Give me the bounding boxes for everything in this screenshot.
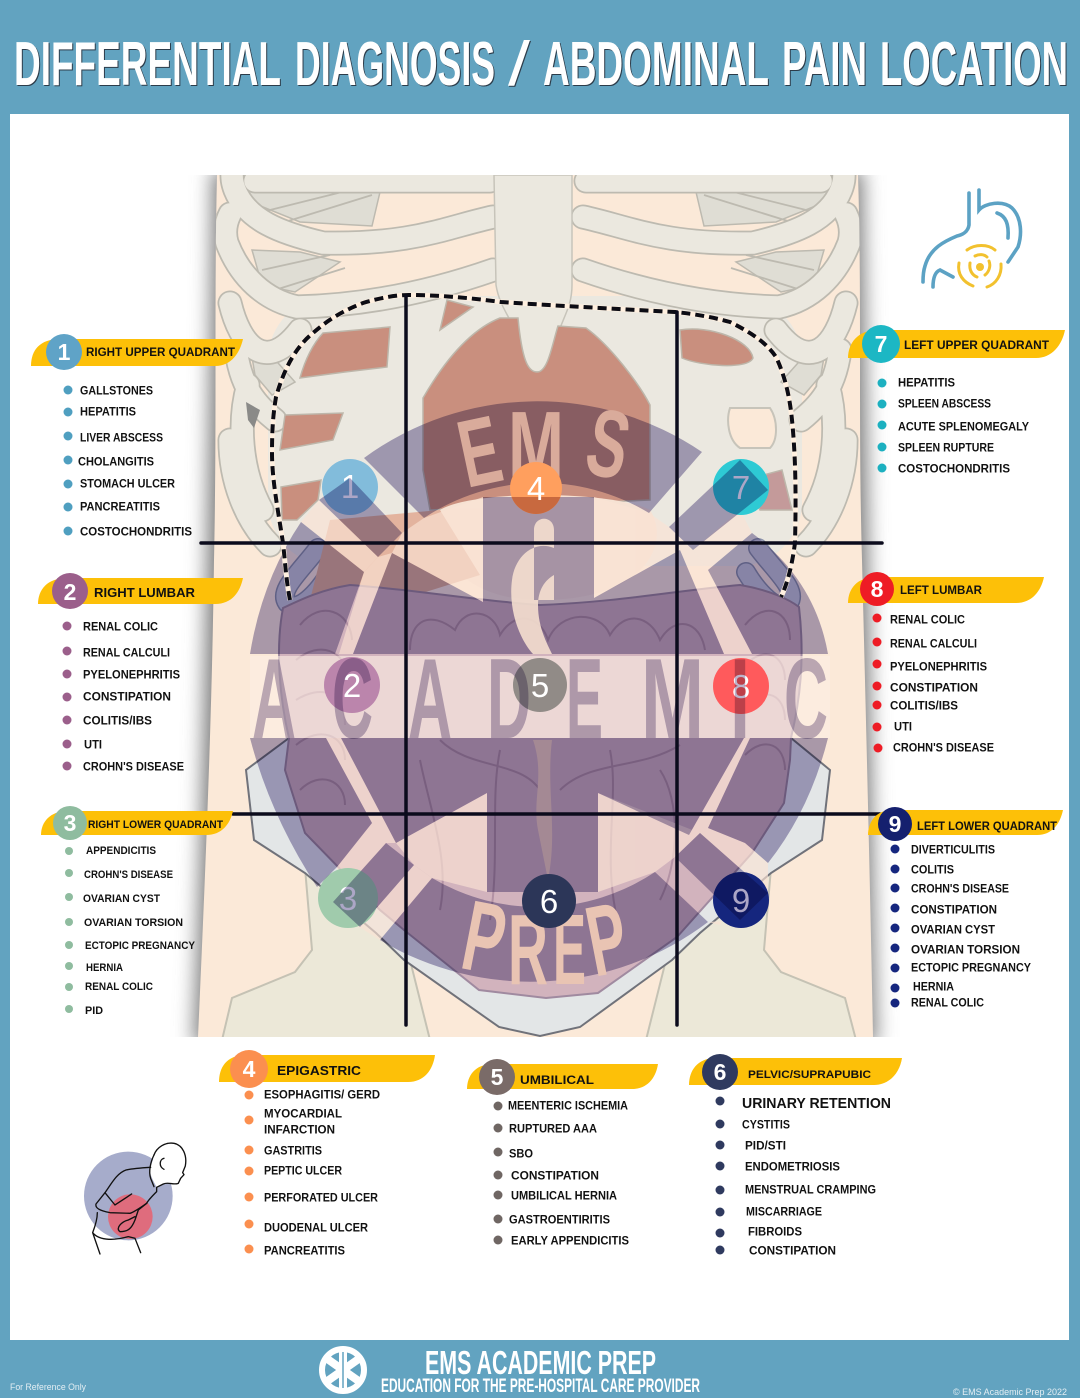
marker 3: 3 [339, 880, 357, 917]
marker 8: 8 [732, 668, 750, 705]
number badge [702, 1054, 738, 1090]
list: COLITIS/IBS [890, 698, 958, 712]
number badge: 2 [64, 579, 76, 605]
PREP arc letters [454, 879, 636, 1006]
number badge [46, 334, 82, 370]
title: ABDOMINAL [543, 30, 769, 99]
number badge [878, 807, 912, 841]
list: INFARCTION [264, 1122, 335, 1136]
panel: umbilical [467, 1059, 658, 1248]
header band [848, 577, 1044, 603]
list: CONSTIPATION [911, 902, 997, 916]
list: URINARY RETENTION [742, 1095, 891, 1112]
title: DIFFERENTIAL [14, 30, 281, 99]
hip bones [222, 868, 430, 1040]
rib cage [226, 172, 850, 606]
title [14, 30, 1068, 99]
list: SBO [509, 1146, 533, 1160]
number badge: 3 [64, 810, 76, 836]
list: RENAL COLIC [911, 996, 984, 1010]
region number circles [318, 459, 769, 928]
academic letters: C [784, 636, 828, 763]
list: COLITIS [911, 862, 954, 876]
list: PERFORATED ULCER [264, 1190, 378, 1204]
list: PID [85, 1005, 103, 1017]
heading: EPIGASTRIC [277, 1063, 362, 1078]
list [64, 384, 192, 538]
header band [41, 811, 233, 835]
list [494, 1098, 629, 1248]
heading: LEFT LUMBAR [900, 583, 982, 597]
header band [38, 578, 243, 604]
academic letters: E [566, 636, 603, 763]
list [890, 842, 1031, 1010]
list [62, 620, 184, 774]
pale patch right side [728, 408, 776, 448]
ring sectors and star of life [250, 401, 828, 982]
stomach and upper organs [440, 495, 653, 566]
PREP arc letters: E [553, 894, 586, 1006]
list: CROHN'S DISEASE [83, 760, 184, 774]
list: RENAL COLIC [890, 612, 965, 626]
list: RENAL COLIC [85, 981, 153, 993]
academic letters: I [730, 636, 750, 763]
list: CYSTITIS [742, 1118, 790, 1132]
marker 8 [713, 658, 769, 714]
list: UTI [894, 720, 912, 734]
list: CROHN'S DISEASE [911, 882, 1009, 896]
panel: right upper quadrant [31, 334, 243, 538]
number badge [479, 1059, 515, 1095]
marker 6: 6 [540, 883, 558, 920]
list: CONSTIPATION [890, 680, 978, 694]
list: PANCREATITIS [264, 1244, 345, 1258]
list: CONSTIPATION [749, 1244, 836, 1258]
list: ACUTE SPLENOMEGALY [898, 420, 1029, 434]
number badge: 8 [871, 576, 884, 602]
header band [467, 1064, 658, 1089]
panel: left lumbar [848, 572, 1044, 754]
list: GALLSTONES [80, 384, 153, 398]
heading: LEFT UPPER QUADRANT [904, 338, 1050, 352]
number badge: 1 [58, 339, 71, 365]
marker 7: 7 [732, 469, 750, 506]
torso skin [180, 175, 900, 1037]
list: RENAL CALCULI [83, 646, 170, 660]
heading: RIGHT LUMBAR [94, 585, 196, 600]
number badge: 5 [491, 1064, 504, 1090]
header band [689, 1058, 902, 1085]
header band [219, 1055, 435, 1082]
marker 7 [713, 459, 769, 515]
marker 9 [713, 872, 769, 928]
list: OVARIAN CYST [911, 922, 996, 936]
watermark logo [250, 388, 828, 1006]
sternum [494, 175, 572, 372]
PREP arc letters: P [454, 879, 515, 997]
panel: right lumbar [38, 573, 243, 774]
list: CROHN'S DISEASE [84, 869, 173, 881]
list: HEPATITIS [898, 376, 955, 390]
list: MISCARRIAGE [746, 1204, 822, 1218]
marker 2 [324, 657, 380, 713]
list: MYOCARDIAL [264, 1106, 342, 1120]
list: STOMACH ULCER [80, 476, 175, 490]
list: RUPTURED AAA [509, 1122, 597, 1136]
list: UMBILICAL HERNIA [511, 1188, 617, 1202]
number badge [862, 325, 900, 363]
mesentery light strip [533, 740, 552, 880]
title: / [508, 30, 531, 99]
watermark light areas [301, 497, 768, 940]
list: CROHN'S DISEASE [893, 740, 994, 754]
academic band [250, 656, 830, 738]
list: FIBROIDS [748, 1224, 802, 1238]
header band [868, 810, 1063, 835]
title: DIAGNOSIS [295, 30, 495, 99]
number badge: 4 [243, 1056, 256, 1082]
academic letters: M [641, 636, 704, 763]
list: ECTOPIC PREGNANCY [911, 960, 1031, 974]
number badge [53, 806, 87, 840]
list: MENSTRUAL CRAMPING [745, 1182, 876, 1196]
grid lines [201, 296, 882, 1025]
marker 6 [522, 874, 576, 928]
list: CHOLANGITIS [78, 454, 154, 468]
PREP arc letters: R [508, 894, 548, 1006]
EMS arc letters: M [508, 392, 564, 499]
list: COSTOCHONDRITIS [898, 462, 1010, 476]
list: MEENTERIC ISCHEMIA [508, 1098, 628, 1112]
panel: right lower quadrant [41, 806, 233, 1017]
marker 1 [322, 459, 378, 515]
title: PAIN [782, 30, 867, 99]
academic letters: A [252, 636, 296, 763]
list: COSTOCHONDRITIS [80, 524, 192, 538]
footer tagline: EDUCATION FOR THE PRE-HOSPITAL CARE PROVIDER [381, 1376, 700, 1397]
marker 5 [513, 658, 567, 712]
panel: left lower quadrant [868, 807, 1063, 1010]
body shadow [194, 170, 876, 1045]
list: PYELONEPHRITIS [83, 668, 180, 682]
number badge: 6 [714, 1059, 726, 1085]
anatomy illustration [180, 170, 900, 1045]
intestines [279, 585, 802, 998]
list: HERNIA [86, 962, 123, 974]
list: OVARIAN TORSION [84, 917, 183, 929]
list: PEPTIC ULCER [264, 1164, 342, 1178]
panel: pelvic/suprapubic [689, 1054, 902, 1258]
number badge: 7 [875, 331, 887, 357]
list: DUODENAL ULCER [264, 1220, 368, 1234]
staff and snake cut-out [511, 519, 554, 654]
academic letters: D [487, 636, 531, 763]
dashed abdomen outline [272, 295, 796, 600]
list: OVARIAN TORSION [911, 942, 1020, 956]
footer title: EMS ACADEMIC PREP [425, 1344, 656, 1381]
list: LIVER ABSCESS [80, 430, 163, 444]
footer left note: For Reference Only [10, 1382, 86, 1392]
EMS arc letters: E [449, 396, 510, 509]
list: HEPATITIS [80, 404, 136, 418]
list: CONSTIPATION [511, 1168, 599, 1182]
pelvis bone [246, 738, 830, 1036]
list: ECTOPIC PREGNANCY [85, 940, 196, 952]
academic letters: A [408, 636, 452, 763]
heading: PELVIC/SUPRAPUBIC [748, 1069, 871, 1081]
list: SPLEEN RUPTURE [898, 440, 994, 454]
marker 1: 1 [341, 468, 359, 505]
list: GASTROENTIRITIS [509, 1212, 610, 1226]
list [716, 1095, 891, 1258]
heading: LEFT LOWER QUADRANT [917, 821, 1057, 833]
number badge [52, 573, 88, 609]
list [65, 845, 196, 1017]
list: ESOPHAGITIS/ GERD [264, 1088, 380, 1102]
marker 4: 4 [527, 470, 545, 507]
academic letters [252, 636, 828, 763]
panel: left upper quadrant [848, 325, 1065, 476]
marker 4 [510, 462, 562, 514]
number badge: 9 [889, 811, 901, 837]
marker 9: 9 [732, 882, 750, 919]
gallbladder shadow [246, 402, 260, 428]
icon: stomach with pain rings [923, 190, 1020, 287]
list: COLITIS/IBS [83, 714, 152, 728]
list [878, 376, 1029, 476]
list: PANCREATITIS [80, 500, 160, 514]
marker 5: 5 [531, 667, 549, 704]
marker 3 [318, 868, 378, 928]
list: RENAL CALCULI [890, 636, 977, 650]
heading: RIGHT UPPER QUADRANT [86, 345, 236, 359]
list [244, 1088, 380, 1258]
list: UTI [84, 738, 102, 752]
heading: UMBILICAL [520, 1073, 594, 1087]
PREP arc letters: P [578, 881, 636, 998]
number badge [230, 1050, 268, 1088]
list: DIVERTICULITIS [911, 842, 995, 856]
panel: epigastric [219, 1050, 435, 1258]
marker 2: 2 [343, 667, 361, 704]
icon: person holding abdomen [84, 1143, 186, 1254]
list [872, 612, 994, 754]
number badge [860, 572, 894, 606]
list: OVARIAN CYST [83, 893, 160, 905]
list: HERNIA [913, 980, 954, 994]
EMS arc letters [449, 388, 639, 509]
pale costal area [268, 296, 802, 566]
list: PID/STI [745, 1138, 786, 1152]
list: SPLEEN ABSCESS [898, 396, 991, 410]
list: APPENDICITIS [86, 845, 156, 857]
list: CONSTIPATION [83, 690, 171, 704]
list: EARLY APPENDICITIS [511, 1234, 629, 1248]
diaphragm and liver shapes [280, 300, 792, 520]
list: ENDOMETRIOSIS [745, 1160, 840, 1174]
copyright: © EMS Academic Prep 2022 [953, 1387, 1067, 1397]
heading: RIGHT LOWER QUADRANT [88, 819, 223, 831]
EMS arc letters: S [578, 388, 639, 501]
list: RENAL COLIC [83, 620, 158, 634]
list: PYELONEPHRITIS [890, 660, 987, 674]
list: GASTRITIS [264, 1144, 322, 1158]
academic letters: C [332, 636, 373, 763]
header band [848, 330, 1065, 358]
footer logo [322, 1349, 364, 1391]
header band [31, 339, 243, 366]
